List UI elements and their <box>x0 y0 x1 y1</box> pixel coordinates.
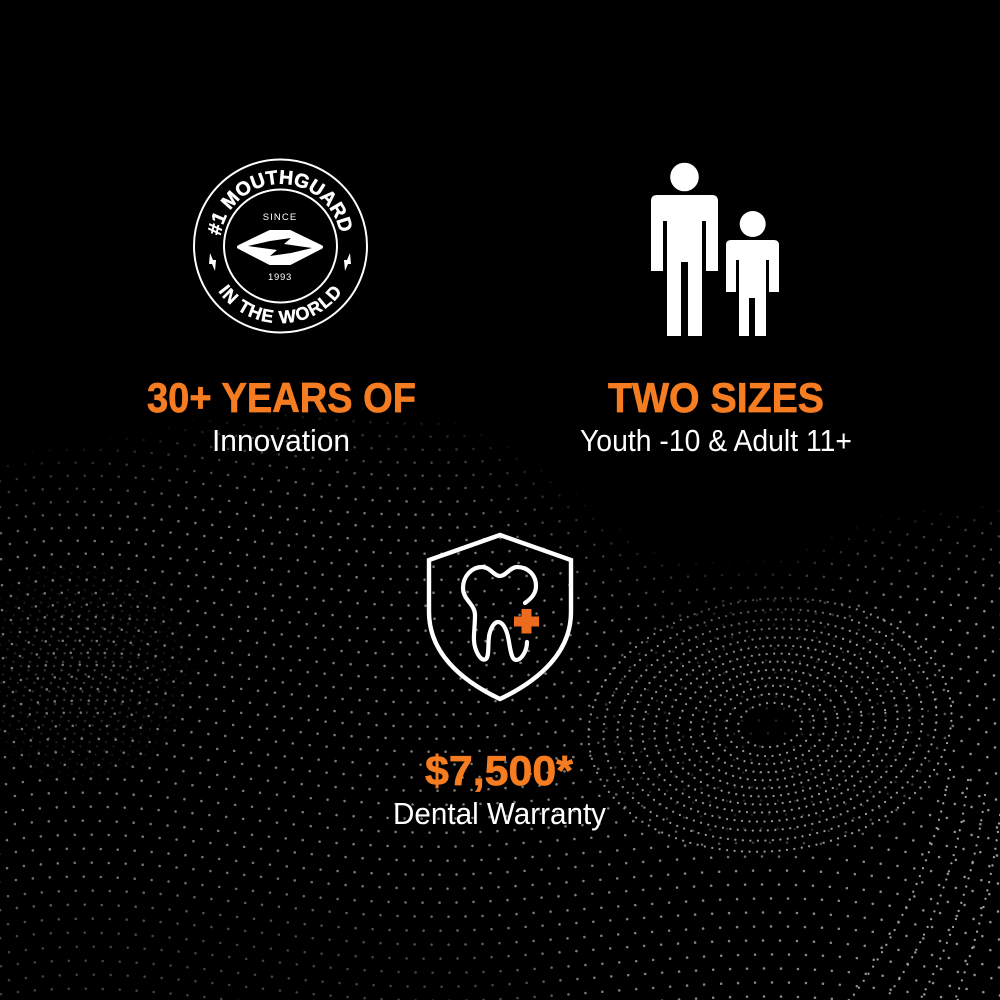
child body <box>726 240 779 336</box>
heading: dental warranty amount: $7,500* <box>425 747 574 794</box>
badge rings <box>194 160 367 332</box>
subheading: innovation: Innovation <box>212 423 350 458</box>
badge: #1 mouthguard in the world <box>193 158 368 334</box>
sparse dot field <box>0 385 1000 1000</box>
child head <box>740 211 766 237</box>
shield outline <box>429 535 571 699</box>
adult head <box>670 163 699 191</box>
lightning diamond logo <box>239 232 321 263</box>
dense concentric dot rings, right <box>587 597 953 853</box>
year label: 1993 <box>268 272 292 283</box>
dense dots, left <box>0 560 189 780</box>
heading: 30+ years of: 30+ YEARS OF <box>147 374 416 421</box>
subheading: youth and adult sizes: Youth -10 & Adult 11+ <box>580 423 852 458</box>
orange plus <box>514 609 539 634</box>
heading: two sizes: TWO SIZES <box>608 374 824 421</box>
radial dot lines, bottom right <box>850 770 1000 1000</box>
subheading: dental warranty: Dental Warranty <box>393 796 606 831</box>
small lightning bolts <box>209 253 351 271</box>
dotted wave background <box>0 408 1000 1000</box>
badge top text: #1 MOUTHGUARD <box>208 170 352 236</box>
since label: SINCE <box>263 212 297 223</box>
tooth outline <box>463 567 536 660</box>
badge bottom text: IN THE WORLD <box>218 284 340 324</box>
clear lattice under rings <box>595 600 945 850</box>
icon: shield with tooth <box>429 535 571 699</box>
icon: adult and child <box>651 163 779 336</box>
adult body <box>651 195 718 336</box>
